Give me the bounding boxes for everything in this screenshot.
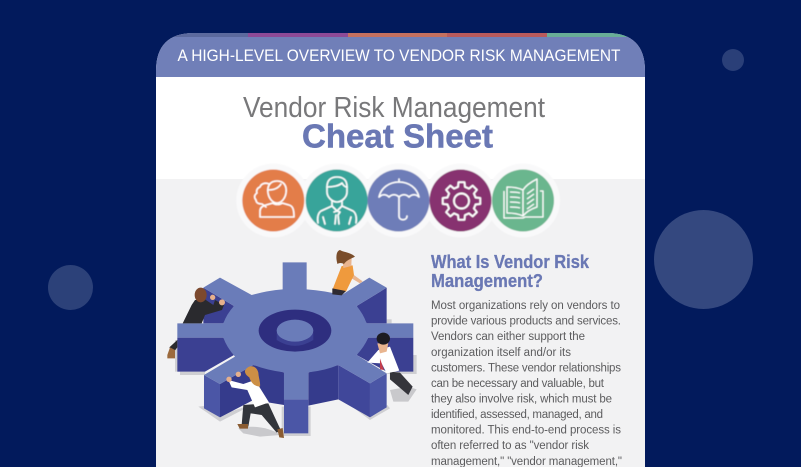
body text: customers. These vendor relationships [431,362,621,374]
gear shadow [175,319,417,436]
body text [431,300,622,467]
body text: organization itself and/or its [431,347,571,359]
decorative background circles [48,49,753,310]
section heading: Management? [431,271,543,291]
person: bottom, white shirt, blonde [226,366,284,438]
icon: open book [492,170,554,232]
body text: Most organizations rely on vendors to [431,300,620,312]
title: Vendor Risk Management [243,92,545,124]
title [243,96,545,148]
icon: gear [430,170,492,232]
body text: they also involve risk, which must be [431,394,612,406]
person: left, dark suit [167,288,225,358]
gear top face [177,262,413,399]
section heading [431,252,590,291]
gear centre hole [259,310,331,352]
icon row [242,168,554,232]
header text: A HIGH-LEVEL OVERVIEW TO VENDOR RISK MANAGEMENT [178,46,620,65]
body text: provide various products and services. [431,316,621,328]
icon: people [242,170,304,232]
body text: identified, assessed, managed, and [431,409,603,421]
body text: monitored. This end-to-end process is [431,424,621,436]
icon: umbrella [368,170,430,232]
panel: cheat sheet card [156,33,645,467]
icon: businessman [306,170,368,232]
body text: Vendors can either support the [431,331,585,343]
person: right, white shirt with tie [367,333,417,402]
illustration: gear with people [167,250,417,438]
body text: often referred to as "vendor risk [431,440,589,452]
person: top, orange shirt [332,250,363,295]
title: Cheat Sheet [302,118,493,154]
header band [156,33,645,77]
body text: can be necessary and valuable, but [431,378,605,390]
gear body sides [177,338,234,372]
section heading: What Is Vendor Risk [431,252,590,272]
